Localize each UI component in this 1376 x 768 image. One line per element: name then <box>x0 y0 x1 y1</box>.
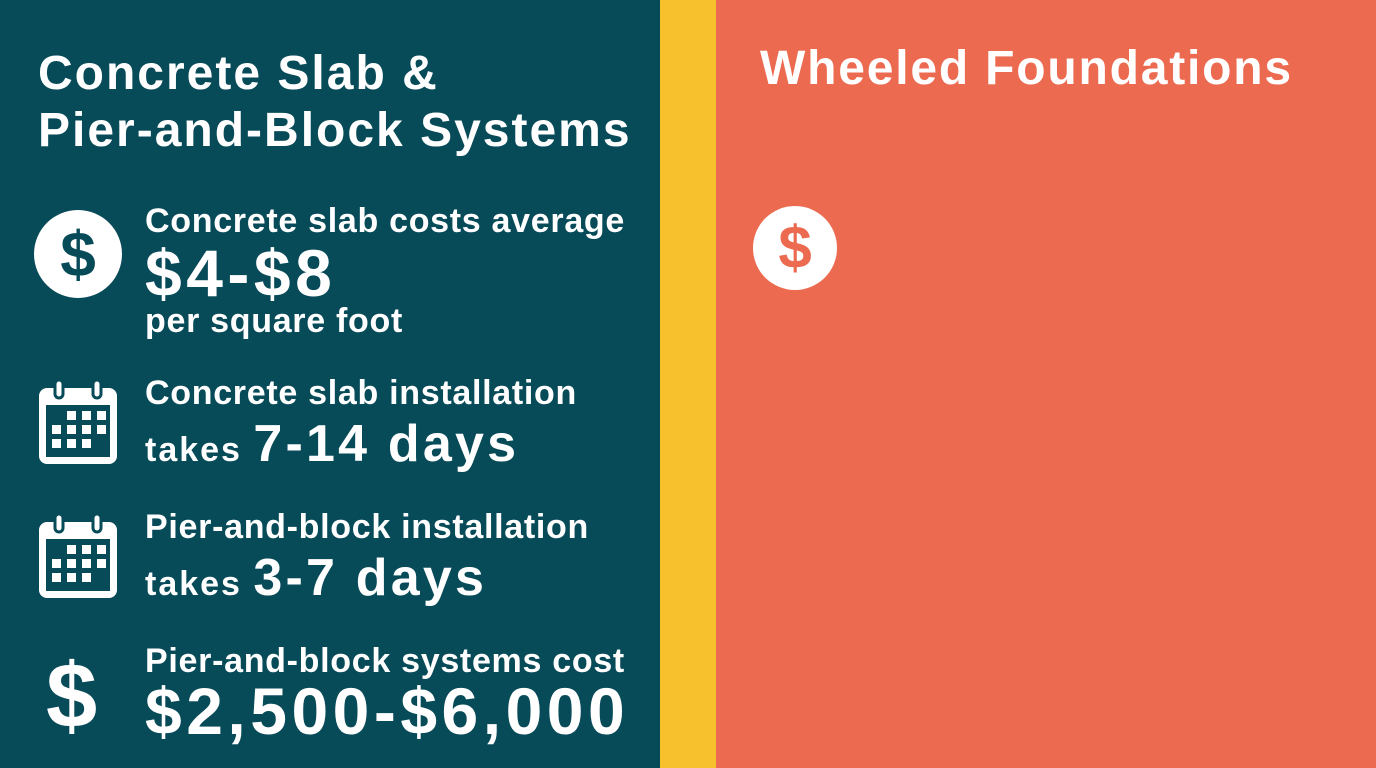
icon: calendar 2 <box>39 516 117 598</box>
divider stripe <box>660 0 716 768</box>
icon: dollar circle <box>753 206 837 290</box>
text: pier cost: $2,500-$6,000 <box>145 674 629 748</box>
text: slab install <box>145 374 577 473</box>
panel: wheeled foundations <box>716 0 1376 768</box>
text: pier install <box>145 508 589 607</box>
text: slab cost <box>145 202 625 340</box>
title <box>38 47 632 157</box>
text: pier install: takes 3-7 days <box>145 549 487 607</box>
text: pier cost <box>145 642 629 748</box>
text: slab cost: Concrete slab costs average <box>145 202 625 240</box>
title: Concrete Slab & <box>38 47 439 100</box>
panel: left concrete slab <box>0 0 660 768</box>
icon: dollar: $ <box>46 645 97 747</box>
text: slab cost: $4-$8 <box>145 236 336 310</box>
text: pier cost: Pier-and-block systems cost <box>145 642 625 680</box>
icon: calendar 1 <box>39 382 117 464</box>
icon: dollar circle <box>34 210 122 298</box>
text: slab install: Concrete slab installation <box>145 374 577 412</box>
title: Pier-and-Block Systems <box>38 104 632 157</box>
icon: dollar circle: $ <box>778 214 812 281</box>
text: slab cost: per square foot <box>145 302 403 340</box>
text: slab install: takes 7-14 days <box>145 415 519 473</box>
icon: dollar circle: $ <box>60 218 96 290</box>
text: pier install: Pier-and-block installation <box>145 508 589 546</box>
title: Wheeled Foundations <box>760 42 1293 95</box>
